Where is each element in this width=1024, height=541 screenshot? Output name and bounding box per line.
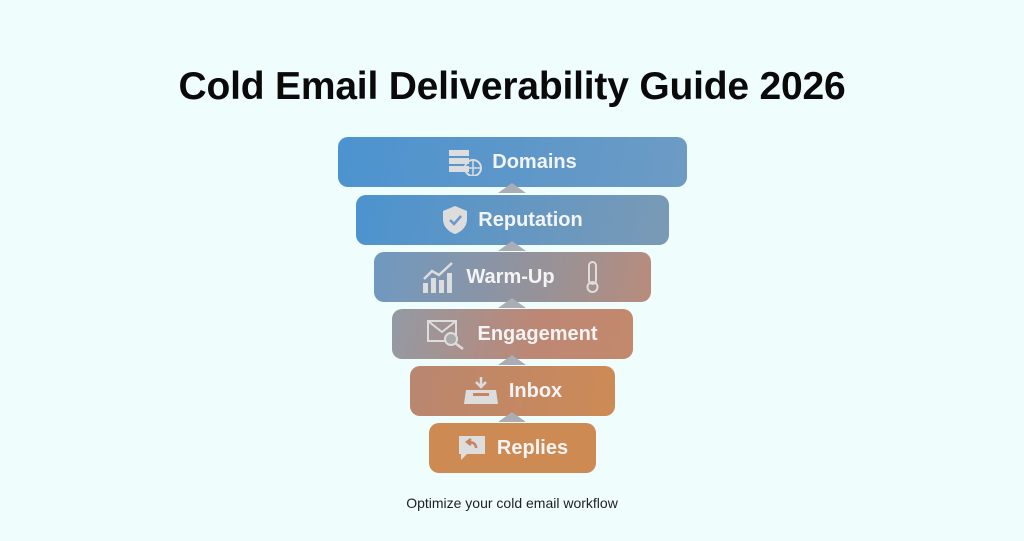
- step: Inbox: Inbox: [509, 380, 562, 402]
- step: Replies: Replies: [497, 436, 568, 458]
- step: Warm-Up: Warm-Up: [466, 266, 555, 288]
- step: Reputation: [356, 195, 669, 245]
- title: Cold Email Deliverability Guide 2026: [179, 65, 845, 108]
- step: Inbox: [410, 366, 615, 416]
- step: Engagement: Engagement: [477, 322, 598, 344]
- arrows: [498, 183, 526, 422]
- step: Domains: Domains: [492, 150, 577, 172]
- step: Replies: [429, 423, 596, 473]
- step: Engagement: [392, 309, 633, 359]
- step: Domains: [338, 137, 687, 187]
- step: Reputation: Reputation: [478, 208, 583, 230]
- step: Warm-Up: [374, 252, 651, 302]
- subtitle: Optimize your cold email workflow: [406, 495, 618, 511]
